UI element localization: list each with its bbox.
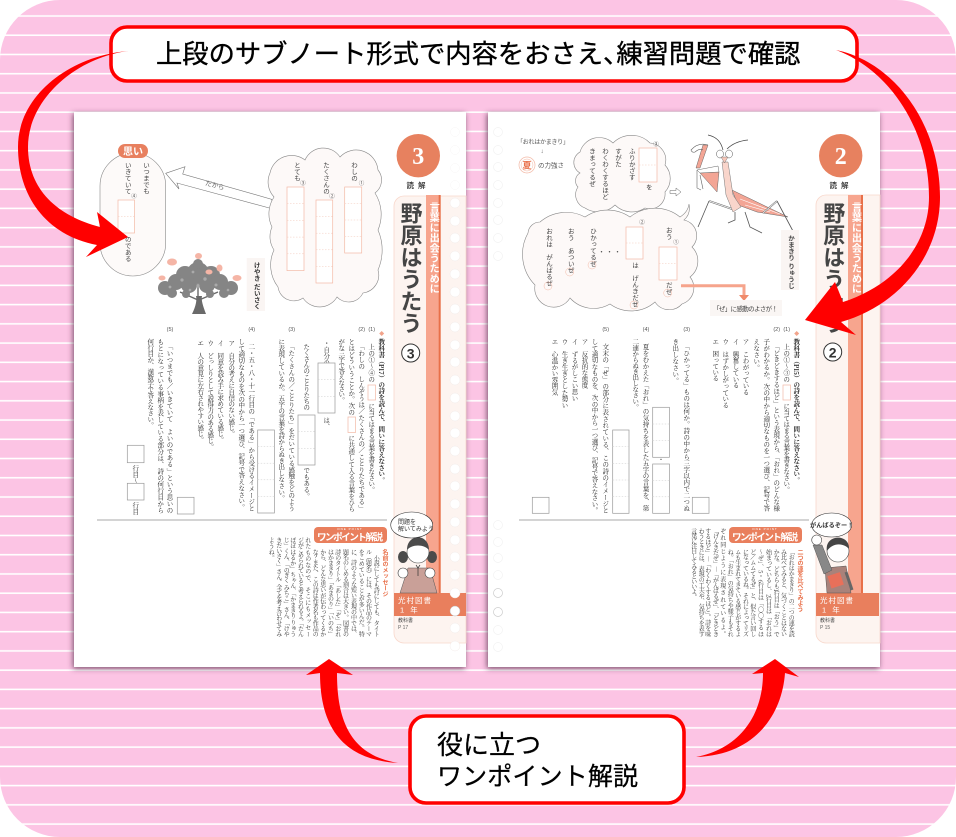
- questions column block: (1): [368, 327, 375, 333]
- publisher block: [816, 593, 879, 631]
- one point explanation: 「おれはかまきり」の二つの連を読: [787, 549, 796, 638]
- publisher block: 1 年: [822, 604, 842, 614]
- scalloped cloud: lower poem stanza: だぜ: [664, 282, 672, 295]
- sidebar panel: [816, 195, 880, 643]
- one point explanation: れたものなので、そこにもメッセー: [304, 537, 313, 637]
- one point explanation: 詩のタイトル「あした」「ぞ」「おれ: [334, 548, 343, 637]
- questions column block: もとになっている事柄を表している部分は、詩の何行目から: [156, 338, 165, 515]
- sidebar subtitle: 言葉に出会うために: [427, 202, 439, 294]
- questions column block: イ 興奮している: [732, 338, 740, 389]
- questions column block: (1): [783, 327, 790, 333]
- questions column block: ウ はずかしがっている: [721, 338, 730, 409]
- questions column block: (3): [288, 327, 295, 333]
- scalloped cloud: upper poem stanza: を: [644, 184, 652, 191]
- scalloped cloud: upper poem stanza: きまってるぜ: [588, 148, 596, 187]
- questions column block: 「いつまでも／いきていて よいのである」という思いの: [166, 343, 174, 514]
- questions column block: 「わしの しんぞうは／たくさんの／ことりたちである」: [357, 343, 366, 511]
- publisher block: 教科書: [820, 617, 835, 624]
- questions column block: がな三字で答えなさい。: [337, 338, 346, 403]
- oval: feeling summary: いつまでも: [142, 162, 150, 195]
- poem label: ore wa kamakiri: ↓: [540, 149, 544, 155]
- questions column block: (2): [358, 327, 365, 333]
- sidebar title: 野原はうたう: [820, 202, 845, 334]
- character: girl with speech bubble: 問題を: [398, 519, 416, 526]
- page number badge 3: [397, 134, 440, 177]
- binder holes: [450, 128, 460, 651]
- questions column block: 二・五・八・十一行目の「である」から受けるイメージと: [247, 343, 256, 512]
- poet label: [781, 230, 799, 290]
- character: boy with speech bubble: がんばるぞー！: [810, 522, 853, 530]
- publisher block: 1 年: [400, 604, 420, 614]
- panel: left workbook page: [74, 112, 466, 667]
- oval: feeling summary: 思い: [123, 146, 143, 158]
- one point explanation: ムも生まれてきている感じがするよ: [734, 549, 743, 637]
- scalloped cloud: answer boxes: たくさんの: [322, 162, 330, 195]
- questions column block: ア 自分の考えに自信のない感じ。: [227, 340, 236, 437]
- questions column block: えなさい。: [752, 338, 761, 371]
- scalloped cloud: upper poem stanza: わくわくするほど: [600, 148, 609, 200]
- scalloped cloud: lower poem stanza: ①: [673, 238, 679, 246]
- scalloped cloud: lower poem stanza: ②: [639, 218, 645, 226]
- one point explanation: ど／ムムてるぜ」と、似た言い回し: [749, 549, 758, 637]
- questions column block: エ 心温かい雰囲気: [550, 338, 560, 397]
- questions column block: 行目〜: [131, 464, 140, 485]
- questions column block: 何行目か、漢数字で答えなさい。: [146, 337, 155, 428]
- questions column block: エ 困っている: [711, 338, 720, 382]
- page number badge 2: 2: [835, 144, 847, 170]
- poet label: かまきり りゅうじ: [786, 235, 795, 289]
- tree illustration with birds: [158, 253, 242, 314]
- publisher block: 光村図書: [820, 595, 854, 605]
- questions column block: 教科書（P17）の詩を読んで、問いに答えなさい。: [377, 337, 386, 483]
- scalloped cloud: upper poem stanza: ③: [653, 140, 659, 148]
- questions column block: (2): [773, 327, 780, 333]
- one point explanation: かな。どちらも1行目は「おう」で: [772, 549, 781, 637]
- poem label: ore wa kamakiri: 夏: [522, 160, 532, 170]
- poet label: けやき だいさく: [252, 262, 260, 310]
- questions column block: に当てはまる言葉を書きなさい。: [367, 402, 376, 493]
- oval: feeling summary: [100, 144, 166, 276]
- arrow: callout to right tip: [696, 659, 799, 757]
- reading label: 読解: [830, 180, 852, 190]
- questions column block: 「たくさんの／ことりたち」をだいている感触をどのよう: [287, 343, 296, 512]
- questions column block: (3): [683, 327, 690, 333]
- questions column block: 二連からぬき出しなさい。: [631, 338, 640, 410]
- scalloped cloud: upper poem stanza: [574, 135, 681, 212]
- questions column block: 教科書（P15）の詩を読んで、問いに答えなさい。: [792, 337, 801, 483]
- character: boy with speech bubble: [810, 513, 853, 593]
- questions column block: [127, 327, 386, 516]
- scalloped cloud: lower poem stanza: [523, 204, 698, 311]
- circled unit number: [824, 343, 842, 361]
- one point explanation: するほど」―「わくわくするほど」。詩を味: [704, 528, 713, 638]
- questions column block: ア こわがっている: [742, 338, 750, 396]
- questions column block: イ 同意を読み手に求めている感じ。: [216, 340, 225, 443]
- questions column block: ウ どっしりとして説得力のある感じ。: [206, 340, 215, 450]
- mantis illustration: [691, 135, 794, 233]
- circled unit number: [402, 344, 420, 362]
- questions column block: して適切なものを次の中から一つ選び、記号で答えなさい。: [237, 338, 246, 510]
- one point badge: ワンポイント解説: [317, 532, 383, 544]
- publisher block: P 17: [398, 625, 408, 631]
- callout: bottom one-point: [410, 716, 684, 803]
- publisher block: [394, 593, 466, 631]
- circled unit number: 2: [829, 344, 837, 360]
- one point explanation: [690, 527, 803, 638]
- one point explanation: 題名のしめる割合は大きい。図書の: [342, 548, 350, 637]
- poem label: ore wa kamakiri: 「おれはかまきり」: [517, 139, 569, 146]
- arrow: heading to left page: [18, 51, 128, 257]
- one point explanation: ようね。: [267, 537, 276, 561]
- questions column block: 「ひかってる」ものは何か。詩の中から三字以内で二つぬ: [682, 343, 691, 512]
- one point badge: [729, 527, 802, 544]
- questions column block: に当てはまる言葉を書きなさい。: [782, 402, 791, 493]
- one point badge: [314, 527, 387, 544]
- page number badge 3: 3: [412, 144, 424, 170]
- questions column block: たくさんのことりたちの: [302, 343, 311, 411]
- questions column block: (4): [643, 327, 650, 333]
- note: ze expression: 「ぜ」に感動のよさが！: [713, 304, 778, 313]
- questions column block: して適切なものを、次の中から一つ選び、記号で答えなさい。: [590, 338, 600, 513]
- questions column block: イ ずるがしこい思い: [570, 338, 580, 402]
- scalloped cloud: lower poem stanza: は げんきだぜ: [630, 262, 639, 308]
- scalloped cloud: upper poem stanza: すがた: [614, 148, 622, 168]
- hollow arrow: dakara: だから: [204, 179, 225, 192]
- questions column block: ア 反抗的な態度: [580, 338, 590, 390]
- scalloped cloud: lower poem stanza: おう あついぜ: [566, 228, 574, 274]
- callout: bottom one-point: 役に立つ: [437, 730, 541, 760]
- questions column block: き出しなさい。: [671, 338, 680, 384]
- one point explanation: じ」くん、「のぎく みちこ」さん、「けや: [282, 537, 291, 637]
- one point explanation: 「げんきだぜ」―「がんばるぜ」、「どきどき: [712, 528, 720, 637]
- callout: top heading: [111, 27, 857, 81]
- scalloped cloud: answer boxes: ①: [359, 179, 365, 187]
- questions column block: は、: [322, 417, 331, 430]
- scalloped cloud: answer boxes: ③: [300, 179, 306, 187]
- questions column block: に表現しているか。五字の言葉を詩からぬき出しなさい。: [277, 338, 286, 501]
- questions column block: とはどういうことか。次の: [347, 338, 356, 416]
- questions column block: でもある。: [302, 467, 311, 500]
- questions column block: ・自分の: [322, 340, 331, 366]
- one point explanation: な？また、この詩は作者名も作品の: [311, 549, 320, 637]
- one point explanation: 小説にしても詩にしても、タイト: [372, 554, 381, 637]
- oval: feeling summary: いきていて: [123, 162, 131, 195]
- one point explanation: はかまきり」「あまのり」「いのち」: [326, 549, 336, 637]
- poem label: ore wa kamakiri: [517, 139, 569, 173]
- questions column block: 上の①〜④の: [367, 342, 376, 383]
- questions column block: ウ 生き生きとした勢い: [560, 338, 570, 409]
- one point explanation: ね。「おれ」の気持ちや様子もそれ: [726, 549, 735, 637]
- scalloped cloud: lower poem stanza: ひかってるぜ: [588, 228, 597, 267]
- scalloped cloud: answer boxes: とても: [292, 162, 301, 182]
- one point badge: ワンポイント解説: [732, 532, 798, 544]
- reading label: 読解: [406, 180, 430, 190]
- scalloped cloud: lower poem stanza: ・・・: [598, 249, 622, 256]
- publisher block: 教科書: [398, 617, 413, 624]
- note: ze expression: [710, 300, 782, 316]
- questions column block: (4): [248, 327, 255, 333]
- questions column block: 夏をむかえた「おれ」の気持ちを表した五字の言葉を、第: [642, 342, 650, 513]
- page number badge 2: [819, 134, 862, 177]
- binder holes: [494, 128, 502, 652]
- one point badge: ONE POINT: [752, 527, 778, 531]
- scalloped cloud: answer boxes: ②: [329, 192, 335, 200]
- questions column block: 行目: [131, 501, 140, 516]
- poem label: ore wa kamakiri: の力強さ: [538, 160, 564, 170]
- one point explanation: をこめていることが多いんだ。特: [357, 549, 366, 638]
- one point explanation: ぞれ同じように表現されているよ。: [719, 528, 728, 637]
- callout: top heading: 上段のサブノート形式で内容をおさえ、練習問題で確認: [156, 39, 800, 69]
- arrow: heading to right page: [805, 50, 940, 335]
- scalloped cloud: lower poem stanza: おれは がんばるぜ: [544, 228, 553, 287]
- one point explanation: 〜ぜ」、5・6行目は「〇〇するほ: [756, 549, 766, 638]
- one point explanation: ぽぽ はるか」ちゃん、「かまきり りゅう: [289, 537, 298, 638]
- panel: right workbook page: [488, 112, 880, 667]
- circled unit number: 3: [407, 346, 415, 362]
- one point explanation: 始まっているし、2行目は「おれは: [764, 548, 774, 638]
- questions column block: [532, 327, 801, 514]
- one point explanation: ジがこめられていると考えられるよ。「たん: [296, 537, 306, 637]
- questions column block: (5): [602, 327, 609, 333]
- questions column block: エ 人の意見に左右されやすい感じ。: [196, 340, 205, 443]
- one point explanation: 二つの連を比べてみよう: [796, 549, 803, 613]
- one point badge: ONE POINT: [337, 527, 363, 531]
- character: girl with speech bubble: [391, 512, 437, 593]
- pink connector arrow: [681, 286, 749, 301]
- scalloped cloud: answer boxes: わしの: [350, 162, 358, 182]
- one point explanation: わうときには、表現の工夫や、気持ちを表す: [697, 528, 706, 638]
- one point explanation: になっているね。それによってリズ: [742, 549, 750, 637]
- one point explanation: に、詩のような短い表現の中では、: [350, 549, 358, 637]
- questions column block: 文末の「ぜ」の部分に表されている、この詩のイメージと: [601, 342, 610, 514]
- arrow: callout to left tip: [306, 659, 398, 763]
- poet label: [247, 258, 265, 311]
- hollow arrow: dakara: [166, 167, 273, 209]
- one point explanation: 言葉に注目してみるといいよ。: [690, 527, 699, 600]
- questions column block: に共通して入る言葉をひら: [347, 435, 356, 513]
- sidebar subtitle: 言葉に出会うために: [850, 202, 862, 294]
- one point explanation: き だいさく」さん。全てを考え合わせてみ: [275, 537, 284, 638]
- one point explanation: み比べてみると、気づくことはない: [780, 549, 788, 637]
- one point explanation: [267, 537, 388, 638]
- publisher block: P 15: [820, 625, 830, 631]
- questions column block: 「どきどきするほど」という表現から、「おれ」のどんな様: [772, 343, 781, 513]
- scalloped cloud: upper poem stanza: ふりかざす: [627, 148, 635, 181]
- character: girl with speech bubble: 解いてみよう: [398, 525, 434, 533]
- questions column block: 上の①〜③の: [782, 342, 791, 383]
- questions column block: 子がわかるか。次の中から適切なものを一つ選び、記号で答: [762, 338, 771, 513]
- sidebar title: 野原はうたう: [398, 202, 422, 334]
- questions column block: ・: [658, 458, 664, 464]
- oval: feeling summary: ④: [131, 192, 137, 200]
- sidebar panel: [394, 128, 466, 651]
- scalloped cloud: lower poem stanza: おう: [664, 227, 672, 240]
- one point explanation: から、どんな思いが伝わってくるか: [319, 549, 328, 637]
- callout: bottom one-point: ワンポイント解説: [437, 763, 638, 791]
- questions column block: (5): [167, 327, 174, 333]
- one point explanation: 名前のメッセージ: [381, 548, 388, 597]
- one point explanation: ル（題名）には、その作品のテーマ: [364, 549, 374, 637]
- oval: feeling summary: のである: [123, 236, 131, 262]
- publisher block: 光村図書: [398, 595, 432, 605]
- scalloped cloud: answer boxes: [268, 148, 382, 307]
